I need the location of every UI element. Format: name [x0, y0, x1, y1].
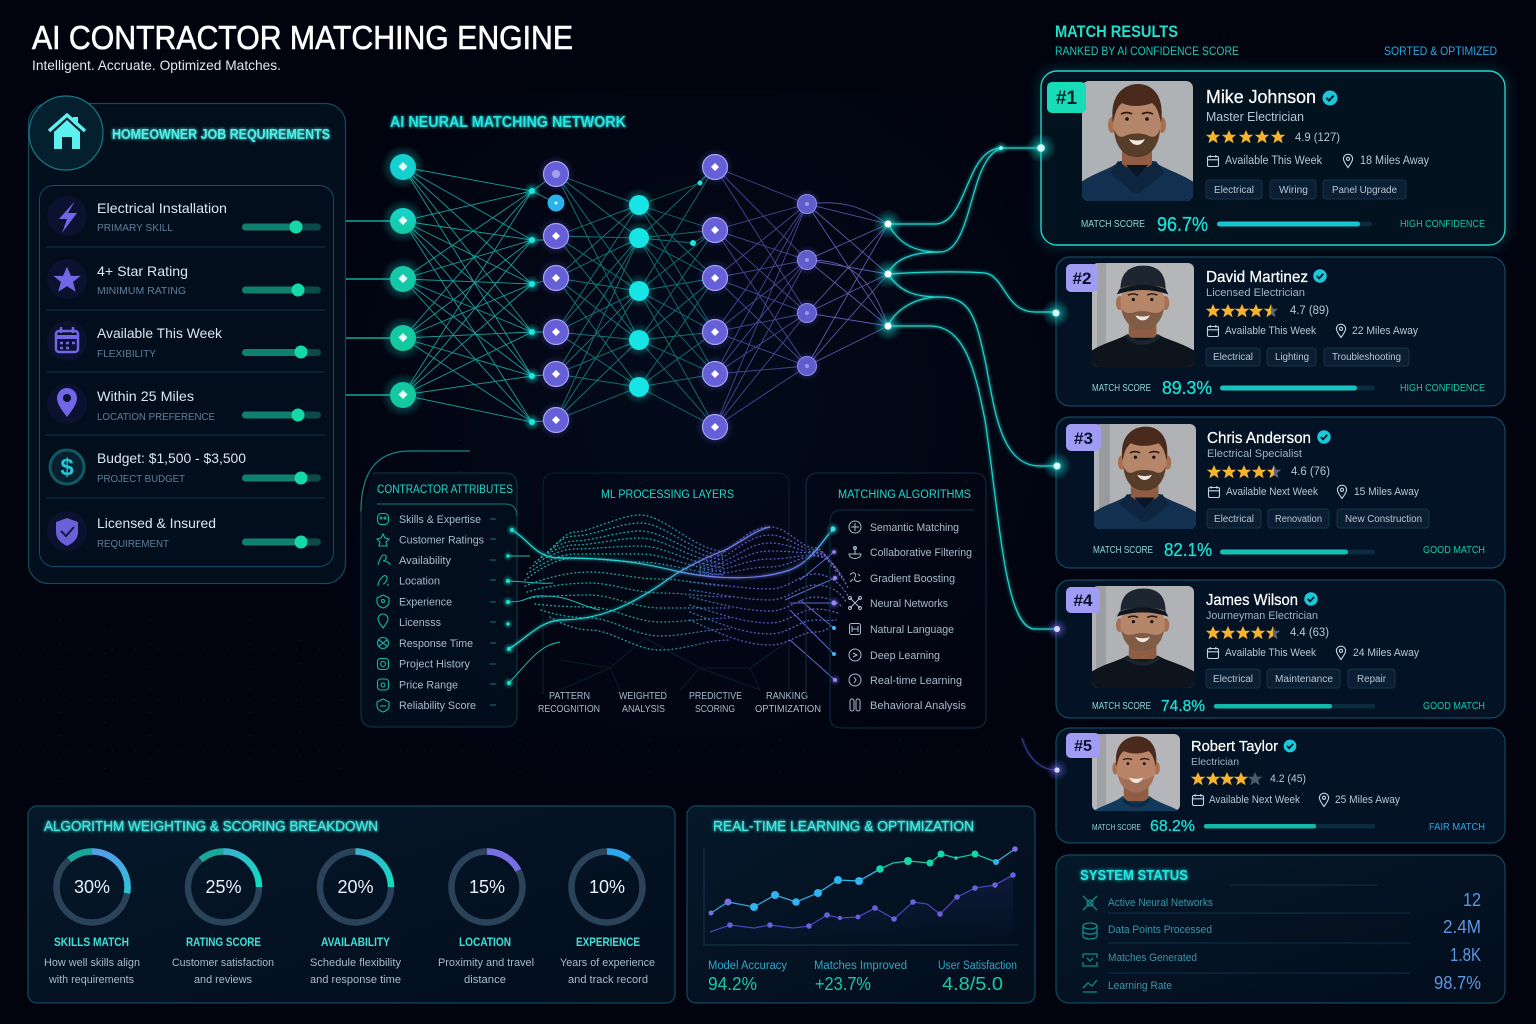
factor descriptions: with requirements: [48, 974, 134, 986]
name: Chris Anderson: [1207, 430, 1311, 447]
panel: homeowner job requirements: [28, 96, 346, 584]
status values: 12: [1463, 890, 1481, 910]
match score: 74.8%: [1161, 698, 1205, 715]
card: rank 1 Mike Johnson: 18 Miles Away: [1360, 155, 1429, 167]
card: rank 4 James Wilson: Available This Week: [1225, 647, 1316, 659]
availability and distance: [1208, 647, 1218, 658]
availability and distance: [1208, 325, 1218, 336]
algorithm list: [870, 522, 972, 712]
requirement: star rating: MINIMUM RATING: [97, 285, 186, 297]
availability and distance: [1192, 794, 1204, 806]
card: rank 3 Chris Anderson: 4.6 (76): [1291, 466, 1330, 478]
match score: MATCH SCORE: [1092, 701, 1151, 712]
skill tags: Electrical: [1213, 674, 1253, 685]
photo: [1092, 263, 1194, 367]
match score: [1081, 214, 1485, 236]
metric: user satisfaction: [938, 960, 1017, 994]
match score: GOOD MATCH: [1423, 700, 1485, 712]
donut values: [74, 877, 625, 897]
skill tags: Electrical: [1214, 514, 1254, 525]
rank badge: [1066, 587, 1100, 613]
factor descriptions: [44, 957, 655, 986]
ribbon lines: [509, 527, 834, 649]
metric: user satisfaction: User Satisfaction: [938, 960, 1017, 972]
network nodes: hubs: [523, 180, 702, 431]
network nodes: layer three: [622, 188, 656, 404]
requirement: distance: Within 25 Miles: [97, 388, 194, 404]
match score: [1092, 698, 1485, 715]
availability and distance: [1208, 486, 1220, 498]
card: rank 1 Mike Johnson: 4.9 (127): [1295, 130, 1340, 144]
rank badge: #5: [1074, 738, 1092, 755]
card: rank 5 Robert Taylor: Available Next Week: [1209, 794, 1300, 806]
status labels: Data Points Processed: [1108, 924, 1212, 936]
card: rank 2 David Martinez: Licensed Electrician: [1206, 287, 1305, 299]
photo: [1077, 81, 1198, 203]
metric: model accuracy: [708, 960, 787, 994]
match score: GOOD MATCH: [1423, 544, 1485, 556]
algorithm list: Real-time Learning: [870, 675, 962, 687]
attribute list: Customer Ratings: [399, 534, 484, 546]
card: rank 3 Chris Anderson: [1056, 417, 1505, 568]
match score: MATCH SCORE: [1092, 383, 1151, 394]
factor descriptions: and response time: [310, 974, 401, 986]
requirement: budget: $: [60, 454, 74, 481]
card: rank 2 David Martinez: 4.7 (89): [1290, 305, 1329, 317]
match results header: RANKED BY AI CONFIDENCE SCORE: [1055, 44, 1239, 58]
rating: [1191, 772, 1262, 785]
requirement: budget: [50, 450, 321, 485]
skill tags: New Construction: [1345, 514, 1422, 525]
factor descriptions: and track record: [568, 974, 648, 986]
connectors: network to result cards: [888, 148, 1057, 770]
attribute icons: [377, 514, 390, 712]
factor descriptions: Proximity and travel: [438, 957, 534, 969]
card: rank 2 David Martinez: [1056, 257, 1505, 406]
metric: user satisfaction: 4.8/5.0: [942, 974, 1003, 994]
name: James Wilson: [1206, 592, 1298, 609]
wave mesh lines: [525, 515, 848, 650]
skill tags: [1206, 669, 1395, 688]
algorithm list: Semantic Matching: [870, 522, 959, 534]
skill tags: Troubleshooting: [1332, 352, 1401, 363]
requirement: star rating: 4+ Star Rating: [97, 263, 188, 279]
attribute list: Licensss: [399, 617, 441, 629]
skill tags: [1207, 509, 1429, 528]
attribute list: Reliability Score: [399, 700, 476, 712]
subtitle: Intelligent. Accruate. Optimized Matches.: [32, 57, 281, 73]
heading: HOMEOWNER JOB REQUIREMENTS: [112, 126, 330, 143]
card: rank 5 Robert Taylor: Electrician: [1191, 756, 1239, 768]
series: top line: [708, 846, 1018, 916]
requirement: electrical installation: [47, 196, 321, 236]
card: rank 5 Robert Taylor: 25 Miles Away: [1335, 794, 1400, 806]
rank badge: [1066, 264, 1098, 292]
rating: [1206, 130, 1285, 143]
algorithm list: Natural Language: [870, 624, 954, 636]
small connector strands: [508, 552, 835, 683]
network nodes: layer five: [792, 189, 822, 381]
heading: REAL-TIME LEARNING & OPTIMIZATION: [713, 819, 974, 835]
icon: house: [29, 96, 103, 170]
requirement: licensed: Licensed & Insured: [97, 515, 216, 531]
name: David Martinez: [1206, 269, 1308, 286]
rank badge: [1066, 733, 1100, 758]
requirement: budget: PROJECT BUDGET: [97, 473, 186, 485]
status labels: Active Neural Networks: [1108, 897, 1213, 909]
line chart: [704, 846, 1018, 945]
status labels: Learning Rate: [1108, 980, 1172, 992]
rank badge: #4: [1074, 591, 1093, 610]
donut values: 25%: [205, 877, 242, 897]
status values: 98.7%: [1434, 973, 1481, 993]
rank badge: [1066, 424, 1101, 451]
factor labels: EXPERIENCE: [576, 937, 640, 949]
factor descriptions: and reviews: [194, 974, 252, 986]
match score: HIGH CONFIDENCE: [1400, 218, 1485, 230]
name: Mike Johnson: [1206, 87, 1316, 107]
skill tags: Renovation: [1275, 514, 1322, 525]
match score: MATCH SCORE: [1081, 218, 1145, 230]
availability and distance: [1208, 155, 1218, 166]
requirement: distance: LOCATION PREFERENCE: [97, 411, 215, 423]
metric: matches improved: [814, 960, 907, 994]
factor labels: SKILLS MATCH: [54, 937, 129, 949]
layer labels: ANALYSIS: [622, 703, 665, 715]
match score: MATCH SCORE: [1092, 822, 1141, 832]
donut values: 30%: [74, 877, 110, 897]
card: rank 3 Chris Anderson: 15 Miles Away: [1354, 486, 1419, 498]
donut values: 20%: [337, 877, 374, 897]
match score: 82.1%: [1164, 540, 1212, 560]
match score: 96.7%: [1157, 214, 1208, 236]
match score: FAIR MATCH: [1429, 821, 1485, 833]
status values: 1.8K: [1450, 945, 1481, 965]
card: rank 2 David Martinez: 22 Miles Away: [1352, 325, 1418, 337]
photo: [1089, 424, 1201, 531]
donut values: 15%: [469, 877, 505, 897]
attribute list: [399, 514, 484, 712]
status icons: [1083, 896, 1097, 992]
attribute list: Experience: [399, 596, 452, 608]
heading: neural network: AI NEURAL MATCHING NETWORK: [390, 114, 626, 131]
signal nodes: [502, 522, 841, 689]
metric: matches improved: +23.7%: [815, 974, 871, 994]
card: rank 4 James Wilson: [1056, 580, 1505, 718]
attribute list: Skills & Expertise: [399, 514, 481, 526]
card: rank 4 James Wilson: 4.4 (63): [1290, 627, 1329, 639]
panel: contractor attributes: [361, 451, 517, 727]
rank badge: #3: [1074, 429, 1093, 448]
title: [32, 19, 573, 73]
skill tags: Repair: [1357, 674, 1387, 685]
panel: ml processing layers: [508, 473, 848, 715]
faint lattice: [560, 638, 790, 690]
card: rank 2 David Martinez: Available This Week: [1225, 325, 1316, 337]
layer labels: RECOGNITION: [538, 703, 600, 715]
match score: 68.2%: [1150, 818, 1195, 835]
card: rank 5 Robert Taylor: 4.2 (45): [1270, 773, 1306, 785]
requirement: electrical installation: PRIMARY SKILL: [97, 222, 173, 234]
match score: [1093, 540, 1485, 560]
skill tags: [1206, 180, 1406, 199]
requirement: licensed: [47, 511, 321, 551]
donut values: 10%: [589, 877, 625, 897]
panel: matching algorithms: [806, 473, 986, 728]
title: AI CONTRACTOR MATCHING ENGINE: [32, 19, 573, 56]
card: rank 1 Mike Johnson: Available This Week: [1225, 155, 1322, 167]
match score: MATCH SCORE: [1093, 545, 1153, 556]
card: rank 3 Chris Anderson: Electrical Specialist: [1207, 448, 1302, 460]
wave mesh dots: [525, 515, 848, 650]
algorithm list: Behavioral Analysis: [870, 700, 966, 712]
donut: skills match 30%: [56, 851, 128, 922]
chart: neural matching network: [346, 145, 888, 446]
match score: HIGH CONFIDENCE: [1400, 382, 1485, 394]
match results header: SORTED & OPTIMIZED: [1384, 44, 1497, 58]
metric: model accuracy: 94.2%: [708, 974, 757, 994]
connector end nodes: [873, 133, 1071, 781]
factor descriptions: Years of experience: [560, 957, 655, 969]
metric: matches improved: Matches Improved: [814, 960, 907, 972]
donut: rating score 25%: [188, 852, 259, 922]
match score: 89.3%: [1162, 378, 1212, 398]
status values: [1434, 890, 1481, 993]
algorithm icons: [848, 521, 862, 711]
card: rank 1 Mike Johnson: Master Electrician: [1206, 110, 1304, 124]
factor labels: AVAILABILITY: [321, 937, 390, 949]
heading: ALGORITHM WEIGHTING & SCORING BREAKDOWN: [44, 819, 378, 835]
layer labels: PATTERN: [549, 690, 590, 702]
card: rank 1 Mike Johnson: [1041, 71, 1505, 245]
requirement: availability: FLEXIBILITY: [97, 348, 156, 360]
status labels: Matches Generated: [1108, 952, 1197, 964]
layer labels: WEIGHTED: [619, 690, 667, 702]
panel: real-time learning: [687, 806, 1035, 1003]
attribute list: Response Time: [399, 638, 473, 650]
requirement: budget: Budget: $1,500 - $3,500: [97, 450, 246, 466]
match score: [1092, 818, 1485, 835]
algorithm list: Neural Networks: [870, 598, 948, 610]
skill tags: Lighting: [1275, 352, 1309, 363]
series: bottom line: [710, 872, 1016, 932]
donut: location 15%: [452, 852, 522, 922]
donut: experience 10%: [572, 851, 642, 922]
rating: [1207, 465, 1281, 478]
card: rank 3 Chris Anderson: Available Next Week: [1226, 486, 1318, 498]
photo: [1087, 586, 1199, 690]
heading: ML PROCESSING LAYERS: [601, 489, 734, 501]
card: rank 5 Robert Taylor: [1056, 728, 1505, 843]
factor labels: LOCATION: [459, 937, 511, 949]
rank badge: #2: [1073, 269, 1091, 288]
status values: 2.4M: [1443, 917, 1481, 937]
factor labels: [54, 937, 640, 949]
match score: [1092, 378, 1485, 398]
skill tags: Wiring: [1279, 184, 1308, 196]
rating: [1206, 626, 1280, 639]
photo: [1092, 734, 1180, 811]
metric: model accuracy: Model Accuracy: [708, 960, 787, 972]
match results header: MATCH RESULTS: [1055, 22, 1178, 41]
algorithm list: Collaborative Filtering: [870, 547, 972, 559]
layer labels: RANKING: [766, 690, 808, 702]
requirement: availability: [47, 321, 321, 361]
heading: CONTRACTOR ATTRIBUTES: [377, 484, 513, 496]
heading: MATCHING ALGORITHMS: [838, 489, 971, 501]
factor descriptions: Schedule flexibility: [310, 957, 401, 969]
rating: [1206, 304, 1278, 317]
skill tags: Maintenance: [1275, 674, 1333, 685]
layer labels: PREDICTIVE: [689, 690, 742, 702]
rank badge: [1047, 82, 1086, 113]
requirement: electrical installation: Electrical Installation: [97, 200, 227, 216]
network nodes: input layer: [381, 145, 425, 417]
panel: algorithm weighting: [28, 806, 675, 1003]
skill tags: [1206, 348, 1409, 366]
card: rank 4 James Wilson: 24 Miles Away: [1353, 647, 1419, 659]
card: rank 4 James Wilson: Journeyman Electrician: [1206, 610, 1318, 622]
requirement: licensed: REQUIREMENT: [97, 538, 170, 550]
layer labels: SCORING: [695, 703, 735, 715]
attribute list: Location: [399, 576, 440, 588]
attribute list: Project History: [399, 658, 470, 670]
algorithm list: Deep Learning: [870, 650, 940, 662]
heading: SYSTEM STATUS: [1080, 867, 1188, 884]
skill tags: Electrical: [1213, 352, 1253, 363]
requirement: star rating: [47, 259, 321, 299]
requirements list: [40, 186, 334, 566]
factor descriptions: distance: [464, 974, 506, 986]
network nodes: layer four: [696, 148, 734, 446]
donut: availability 20%: [320, 852, 391, 922]
requirement: distance: [47, 384, 321, 424]
network nodes: layer two: [537, 155, 575, 439]
attribute list: Availability: [399, 555, 451, 567]
requirement: availability: Available This Week: [97, 325, 223, 341]
factor descriptions: How well skills align: [44, 957, 140, 969]
layer labels: OPTIMIZATION: [755, 703, 821, 715]
rank badge: #1: [1056, 88, 1077, 109]
factor labels: RATING SCORE: [186, 937, 261, 949]
layer labels: [538, 690, 821, 715]
match results header: [1055, 22, 1497, 58]
status labels: [1108, 897, 1213, 992]
attribute list: Price Range: [399, 680, 458, 692]
algorithm list: Gradient Boosting: [870, 573, 955, 585]
panel: system status: [1056, 855, 1505, 1003]
skill tags: Electrical: [1214, 184, 1254, 196]
factor descriptions: Customer satisfaction: [172, 957, 274, 969]
name: Robert Taylor: [1191, 738, 1278, 755]
skill tags: Panel Upgrade: [1332, 184, 1397, 196]
